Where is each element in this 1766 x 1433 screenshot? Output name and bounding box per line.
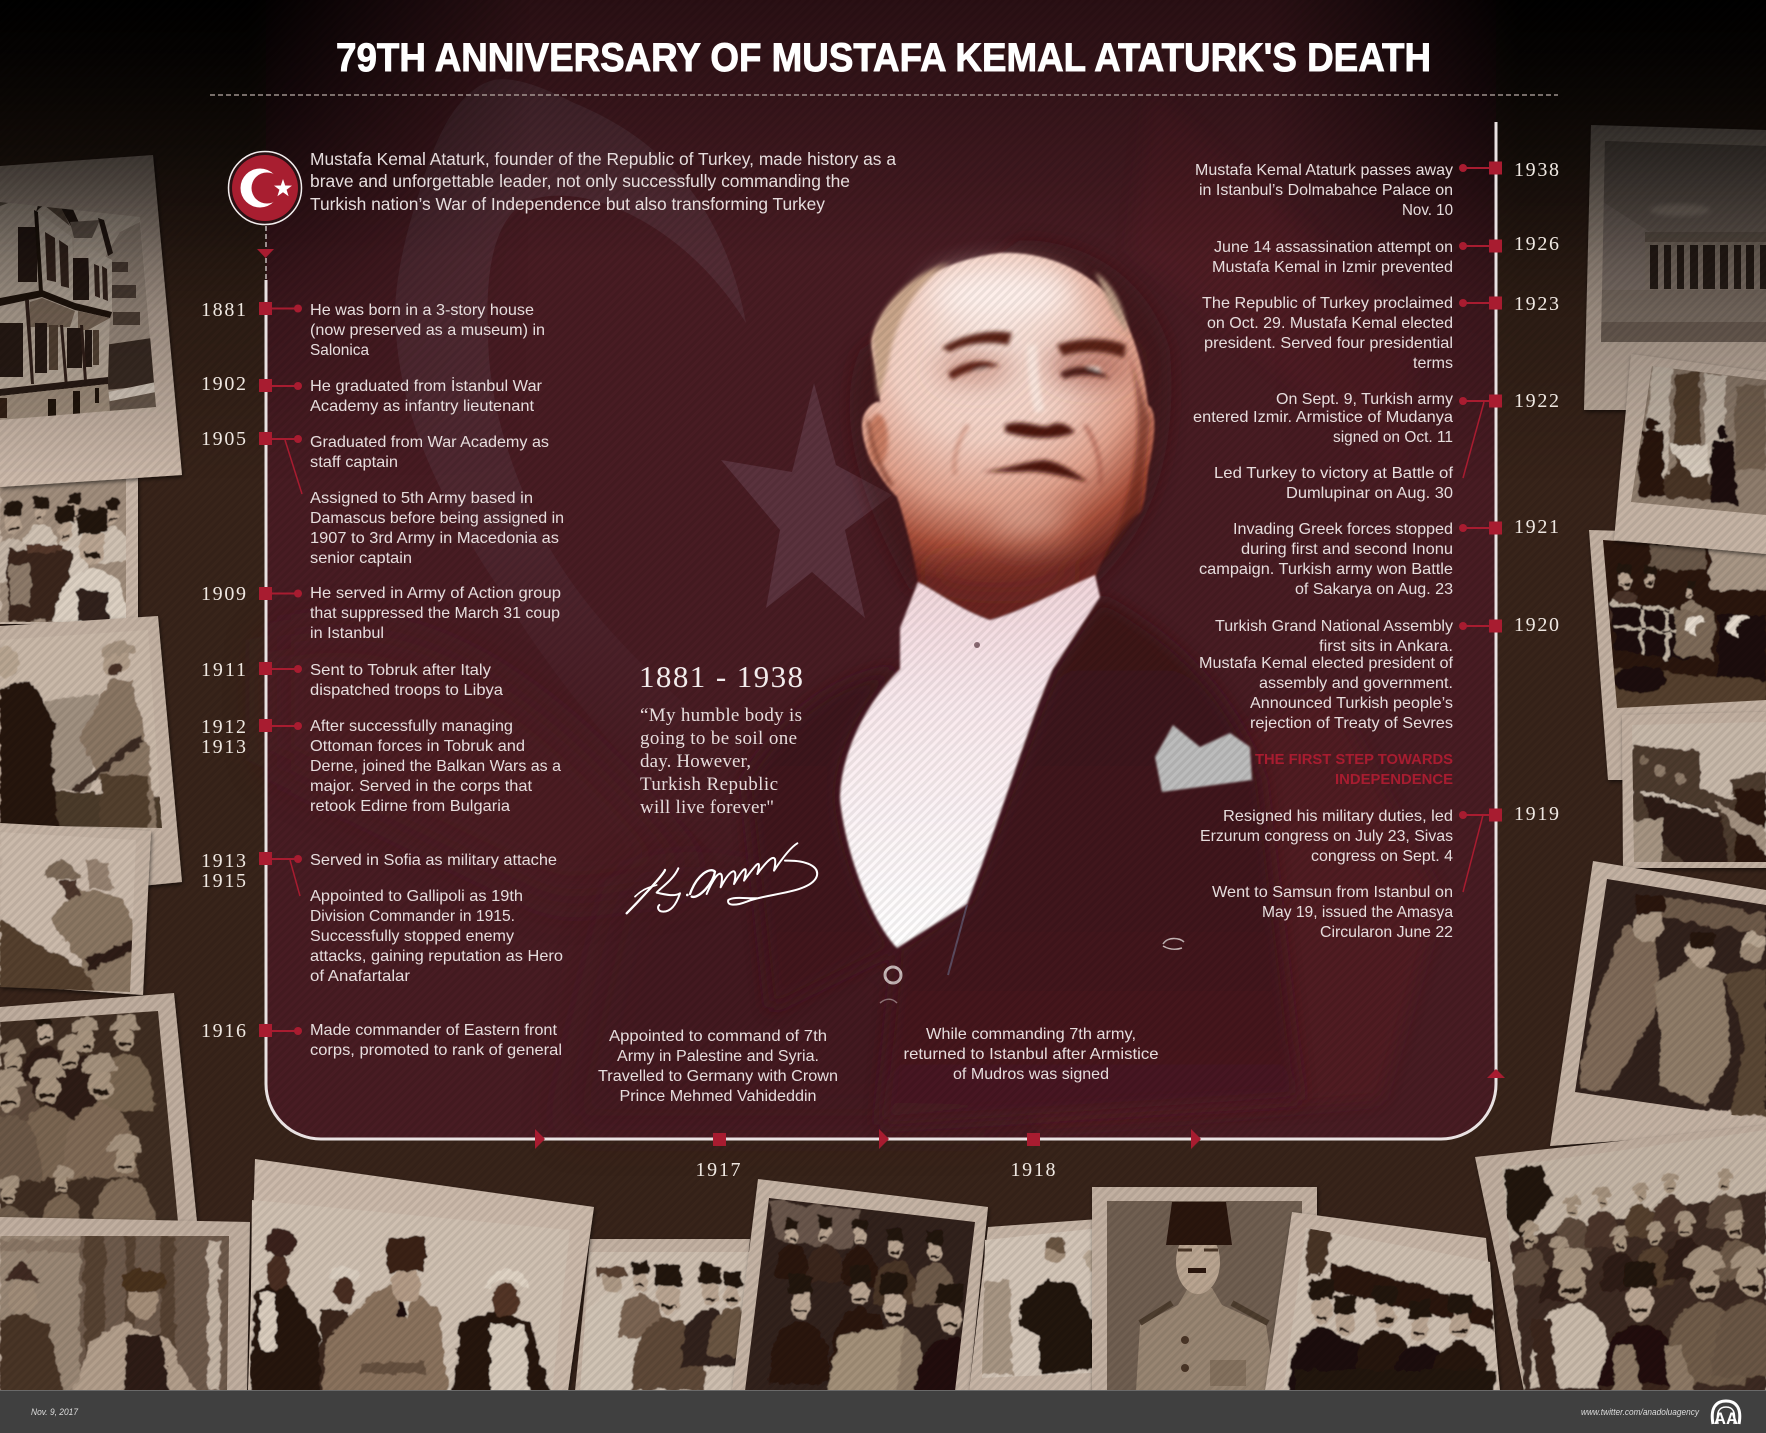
- text: quote: day. However,: [640, 751, 751, 772]
- text: left timeline entries: Made commander of Eastern front: [310, 1022, 558, 1039]
- text: right timeline entries: president. Served four presidential: [1204, 335, 1453, 352]
- text: quote: “My humble body is: [640, 705, 802, 726]
- icon: agency logo: [1712, 1401, 1740, 1428]
- text: right timeline entries: on Oct. 29. Mustafa Kemal elected: [1207, 315, 1453, 332]
- text: right timeline entries: Mustafa Kemal elected president of: [1199, 655, 1454, 672]
- right years: 1938: [1514, 159, 1559, 181]
- left years: 1902: [201, 373, 246, 395]
- photo: birth house: [0, 155, 182, 487]
- text: right timeline entries: first sits in Ankara.: [1319, 638, 1453, 655]
- text: lifespan: 1881 - 1938: [639, 659, 803, 694]
- left years: 1913: [201, 850, 246, 872]
- text: quote: [640, 705, 802, 818]
- text: left timeline entries: 1907 to 3rd Army in Macedonia as: [310, 530, 559, 547]
- text: right timeline entries: May 19, issued the Amasya: [1262, 904, 1453, 921]
- right years: 1919: [1514, 803, 1559, 825]
- text: left timeline entries: Appointed to Gallipoli as 19th: [310, 888, 523, 905]
- text: right timeline entries: rejection of Treaty of Sevres: [1250, 715, 1453, 732]
- photo: delegation walking: [1265, 1212, 1505, 1404]
- photo: officer with bandolier: [968, 1220, 1092, 1390]
- text: 1918 entry: returned to Istanbul after Armistice: [904, 1046, 1159, 1063]
- footer bar: [0, 1390, 1766, 1433]
- text: right timeline entries: of Sakarya on Aug. 23: [1295, 581, 1453, 598]
- right years: 1923: [1514, 293, 1559, 315]
- text: 1917 entry: Travelled to Germany with Crown: [598, 1068, 838, 1085]
- bottom timeline markers: [713, 1133, 1040, 1146]
- photo: Anitkabir mausoleum: [1584, 125, 1766, 410]
- text: right timeline entries: Dumlupinar on Aug. 30: [1286, 485, 1453, 502]
- text: right timeline entries: Led Turkey to victory at Battle of: [1214, 465, 1454, 482]
- photo: parliament session: [1622, 712, 1766, 870]
- text: left timeline entries: attacks, gaining reputation as Hero: [310, 948, 563, 965]
- flag crescent: [395, 79, 800, 860]
- right years: 1922: [1514, 390, 1559, 412]
- title: 79TH ANNIVERSARY OF MUSTAFA KEMAL ATATURK'S DEATH: [336, 36, 1431, 80]
- text: right timeline entries: [1193, 162, 1454, 941]
- photo: office group: [0, 478, 140, 626]
- text: left timeline entries: He was born in a 3-story house: [310, 302, 534, 319]
- text: left timeline entries: Division Commander in 1915.: [310, 908, 515, 925]
- text: quote: Turkish Republic: [640, 774, 778, 795]
- text: intro: brave and unforgettable leader, not only successfully commanding the: [310, 171, 850, 191]
- text: left timeline entries: corps, promoted to rank of general: [310, 1042, 562, 1059]
- text: intro: Mustafa Kemal Ataturk, founder of the Republic of Turkey, made history as a: [310, 149, 896, 169]
- text: quote: will live forever": [640, 797, 774, 818]
- text: left timeline entries: Served in Sofia as military attache: [310, 852, 557, 869]
- text: left timeline entries: dispatched troops to Libya: [310, 682, 503, 699]
- text: left timeline entries: major. Served in the corps that: [310, 778, 533, 795]
- timeline line: [257, 122, 1505, 1149]
- text: right timeline entries: in Istanbul’s Dolmabahce Palace on: [1199, 182, 1453, 199]
- text: left timeline entries: that suppressed the March 31 coup: [310, 605, 560, 622]
- text: 1917 entry: [598, 1028, 838, 1105]
- text: intro: Turkish nation’s War of Independence but also transforming Turkey: [310, 194, 825, 214]
- text: right timeline entries: Circularon June 22: [1320, 924, 1453, 941]
- icon: agency logo: AA: [1714, 1409, 1738, 1428]
- left years: 1911: [201, 659, 246, 681]
- text: right timeline entries: Erzurum congress on July 23, Sivas: [1200, 828, 1453, 845]
- collar pin: [974, 642, 980, 648]
- arrows: [257, 249, 1505, 1149]
- text: left timeline entries: retook Edirne from Bulgaria: [310, 798, 510, 815]
- right years: 1921: [1514, 516, 1559, 538]
- bottom years: 1917: [696, 1159, 740, 1181]
- photo: officers group: [0, 993, 197, 1248]
- head: [862, 253, 1154, 620]
- text: 1918 entry: [904, 1026, 1159, 1083]
- signature: [627, 843, 817, 913]
- text: right timeline entries: terms: [1413, 355, 1453, 372]
- text: right timeline entries: signed on Oct. 11: [1333, 429, 1453, 446]
- text: 1917 entry: Army in Palestine and Syria.: [617, 1048, 819, 1065]
- text: left timeline entries: He served in Army of Action group: [310, 585, 561, 602]
- left years: 1912: [201, 716, 246, 738]
- photo: assembly balconies: [1589, 530, 1766, 780]
- text: right timeline entries: Resigned his military duties, led: [1223, 808, 1453, 825]
- date: Nov. 9, 2017: [31, 1407, 79, 1417]
- text: left timeline entries: Graduated from War Academy as: [310, 434, 549, 451]
- right years: 1920: [1514, 614, 1559, 636]
- right timeline markers: [1459, 162, 1502, 892]
- text: left timeline entries: Assigned to 5th Army based in: [310, 490, 533, 507]
- text: 1918 entry: of Mudros was signed: [953, 1066, 1109, 1083]
- text: right timeline entries: On Sept. 9, Turkish army: [1276, 391, 1453, 408]
- text: right timeline entries: congress on Sept. 4: [1311, 848, 1453, 865]
- text: right timeline entries: during first and second Inonu: [1241, 541, 1453, 558]
- photo: two officers: [0, 1217, 250, 1400]
- text: right timeline entries: Turkish Grand National Assembly: [1215, 618, 1453, 635]
- heading: first step towards independence: [1255, 751, 1453, 788]
- text: left timeline entries: (now preserved as a museum) in: [310, 322, 545, 339]
- text: left timeline entries: Ottoman forces in Tobruk and: [310, 738, 525, 755]
- facial features: [868, 262, 1150, 565]
- bottom years: 1918: [1010, 1159, 1056, 1181]
- text: intro: [310, 149, 896, 214]
- photo: leaders walking: [1550, 861, 1766, 1146]
- title divider: [210, 94, 1558, 96]
- text: right timeline entries: June 14 assassination attempt on: [1214, 239, 1453, 256]
- text: left timeline entries: Salonica: [310, 342, 369, 359]
- left years: 1915: [201, 870, 246, 892]
- icon: Turkish flag badge: [228, 152, 302, 224]
- text: right timeline entries: campaign. Turkish army won Battle: [1199, 561, 1453, 578]
- text: left timeline entries: Derne, joined the Balkan Wars as a: [310, 758, 561, 775]
- bottom years: [696, 1159, 1056, 1181]
- facial highlights and shading: [925, 269, 1132, 588]
- shirt collar: [840, 575, 1100, 948]
- twitter url: www.twitter.com/anadoluagency: [1581, 1407, 1700, 1418]
- photo: assembled group third: [575, 1239, 750, 1390]
- text: left timeline entries: senior captain: [310, 550, 412, 567]
- left years: 1881: [201, 299, 246, 321]
- text: left timeline entries: [310, 302, 564, 1059]
- text: right timeline entries: Announced Turkish people’s: [1250, 695, 1453, 712]
- text: right timeline entries: assembly and government.: [1259, 675, 1453, 692]
- right years: [1514, 159, 1559, 825]
- suit: [745, 240, 1300, 1125]
- photo: officers with Mustafa Kemal: [1475, 1120, 1766, 1408]
- heading: first step towards independence: INDEPENDENCE: [1335, 771, 1453, 788]
- text: left timeline entries: Successfully stopped enemy: [310, 928, 514, 945]
- left years: 1909: [201, 583, 246, 605]
- vest buttons: [880, 905, 1184, 1003]
- heading: first step towards independence: THE FIRST STEP TOWARDS: [1255, 751, 1453, 768]
- text: left timeline entries: He graduated from İstanbul War: [310, 376, 543, 395]
- text: left timeline entries: staff captain: [310, 454, 398, 471]
- right years: 1926: [1514, 233, 1559, 255]
- portrait of Ataturk: [745, 240, 1300, 1125]
- text: right timeline entries: Invading Greek forces stopped: [1233, 521, 1453, 538]
- text: left timeline entries: Academy as infantry lieutenant: [310, 398, 535, 415]
- text: left timeline entries: After successfully managing: [310, 718, 513, 735]
- panel: maroon flag field: [266, 0, 1496, 1139]
- text: 1918 entry: While commanding 7th army,: [926, 1026, 1136, 1043]
- text: left timeline entries: Damascus before being assigned in: [310, 510, 564, 527]
- photo: portrait in fez: [1092, 1187, 1317, 1391]
- text: 1917 entry: Prince Mehmed Vahideddin: [620, 1088, 816, 1105]
- text: right timeline entries: Mustafa Kemal Ataturk passes away: [1195, 162, 1453, 179]
- text: right timeline entries: entered Izmir. Armistice of Mudanya: [1193, 409, 1453, 426]
- flag star: [721, 383, 892, 618]
- photo: seated group: [732, 1179, 988, 1409]
- text: 1917 entry: Appointed to command of 7th: [609, 1028, 827, 1045]
- left years: 1913: [201, 736, 246, 758]
- text: quote: going to be soil one: [640, 728, 797, 749]
- text: right timeline entries: Went to Samsun from Istanbul on: [1212, 884, 1453, 901]
- text: left timeline entries: of Anafartalar: [310, 968, 411, 985]
- text: left timeline entries: Sent to Tobruk after Italy: [310, 662, 491, 679]
- text: left timeline entries: in Istanbul: [310, 625, 384, 642]
- photo: funeral catafalque: [1614, 354, 1766, 554]
- text: right timeline entries: Nov. 10: [1402, 202, 1453, 219]
- photo: soldier in trench: [0, 823, 151, 1000]
- photo: officers in field: [0, 616, 182, 900]
- left timeline markers: [259, 302, 302, 1037]
- text: right timeline entries: Mustafa Kemal in Izmir prevented: [1212, 259, 1453, 276]
- left years: 1916: [201, 1020, 246, 1042]
- text: right timeline entries: The Republic of Turkey proclaimed: [1202, 295, 1453, 312]
- pocket handkerchief: [1155, 725, 1252, 792]
- vignette: [0, 0, 1766, 480]
- left years: 1905: [201, 428, 246, 450]
- photo: commanders with sheikhs: [240, 1159, 594, 1400]
- left years: [201, 299, 246, 1042]
